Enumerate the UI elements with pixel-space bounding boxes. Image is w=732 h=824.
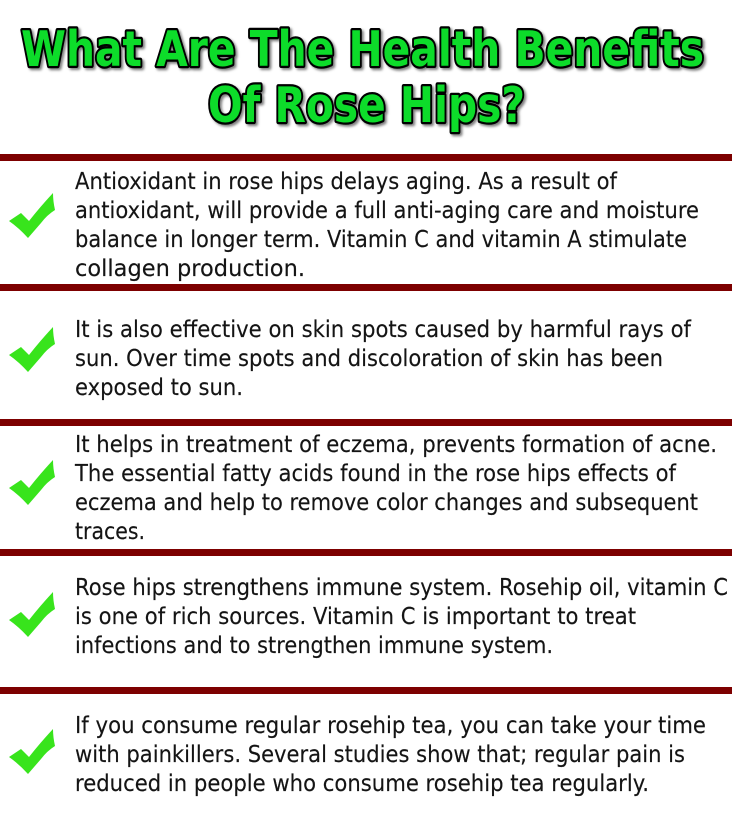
title xyxy=(21,21,704,134)
text: skin spots: sun. Over time spots and discoloration of skin has been xyxy=(75,344,663,372)
text: immune system xyxy=(75,573,728,659)
icon: green check mark xyxy=(9,729,55,774)
text: anti-aging: collagen production. xyxy=(75,254,305,282)
icon: green check mark xyxy=(9,193,55,238)
panel: eczema benefit xyxy=(9,430,717,545)
text: rosehip tea: reduced in people who consume rosehip tea regularly. xyxy=(75,769,649,797)
text: rosehip tea xyxy=(75,711,706,797)
text: immune system: infections and to strengthen immune system. xyxy=(75,631,553,659)
panel: rosehip tea benefit xyxy=(9,711,706,797)
panel: immune system benefit xyxy=(9,573,728,659)
icon: green check mark xyxy=(9,460,55,505)
text: eczema: traces. xyxy=(75,517,145,545)
icon: green check mark xyxy=(9,592,55,637)
text: skin spots xyxy=(75,315,692,401)
text: immune system: is one of rich sources. Vitamin C is important to treat xyxy=(75,602,636,630)
title: Of Rose Hips? xyxy=(208,77,525,134)
text: eczema: The essential fatty acids found in the rose hips effects of xyxy=(74,459,677,487)
icon: green check mark xyxy=(9,327,55,372)
text: skin spots: exposed to sun. xyxy=(75,373,243,401)
text: eczema xyxy=(74,430,717,545)
text: anti-aging: Antioxidant in rose hips delays aging. As a result of xyxy=(75,167,618,195)
panel: skin spots benefit xyxy=(9,315,692,401)
text: anti-aging xyxy=(75,167,699,282)
panel: anti-aging benefit xyxy=(9,167,699,282)
